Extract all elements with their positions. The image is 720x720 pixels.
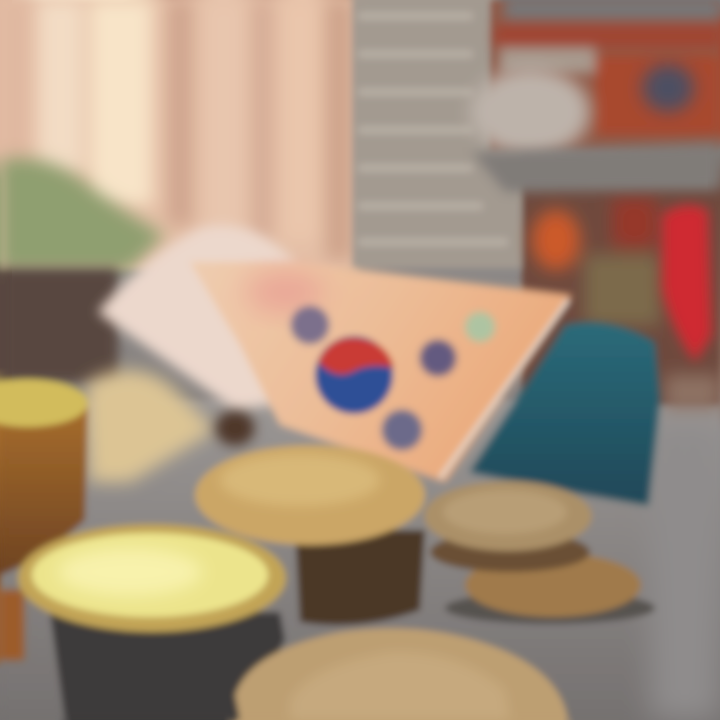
white dome	[470, 68, 590, 156]
dark wall at left	[0, 268, 118, 383]
pagoda: lower storey	[522, 185, 720, 410]
cream block at left	[85, 370, 215, 482]
card: back sheet	[98, 225, 300, 410]
ground	[0, 400, 720, 720]
curtains: peach vertical stripes	[0, 0, 358, 270]
right coin stack	[424, 481, 655, 624]
ground at right	[650, 425, 720, 720]
Korean flag card	[98, 225, 572, 482]
flag: trigram dots	[291, 306, 495, 450]
large bright coin	[18, 524, 286, 720]
teal box	[470, 322, 660, 505]
card: white edge	[440, 300, 568, 478]
tall grey building	[352, 0, 524, 268]
green mound	[0, 158, 165, 270]
card: dark notch	[215, 410, 255, 446]
bottom coin	[235, 628, 568, 720]
flag: taegeuk symbol	[315, 336, 394, 414]
centre coin stack	[195, 445, 425, 625]
low coin far left	[0, 590, 24, 660]
gold cylinder at left	[0, 379, 88, 575]
pagoda: upper storey	[490, 0, 720, 150]
card: pink patch	[245, 272, 325, 312]
pagoda: grey roof	[472, 142, 720, 192]
card: flag	[190, 262, 572, 482]
